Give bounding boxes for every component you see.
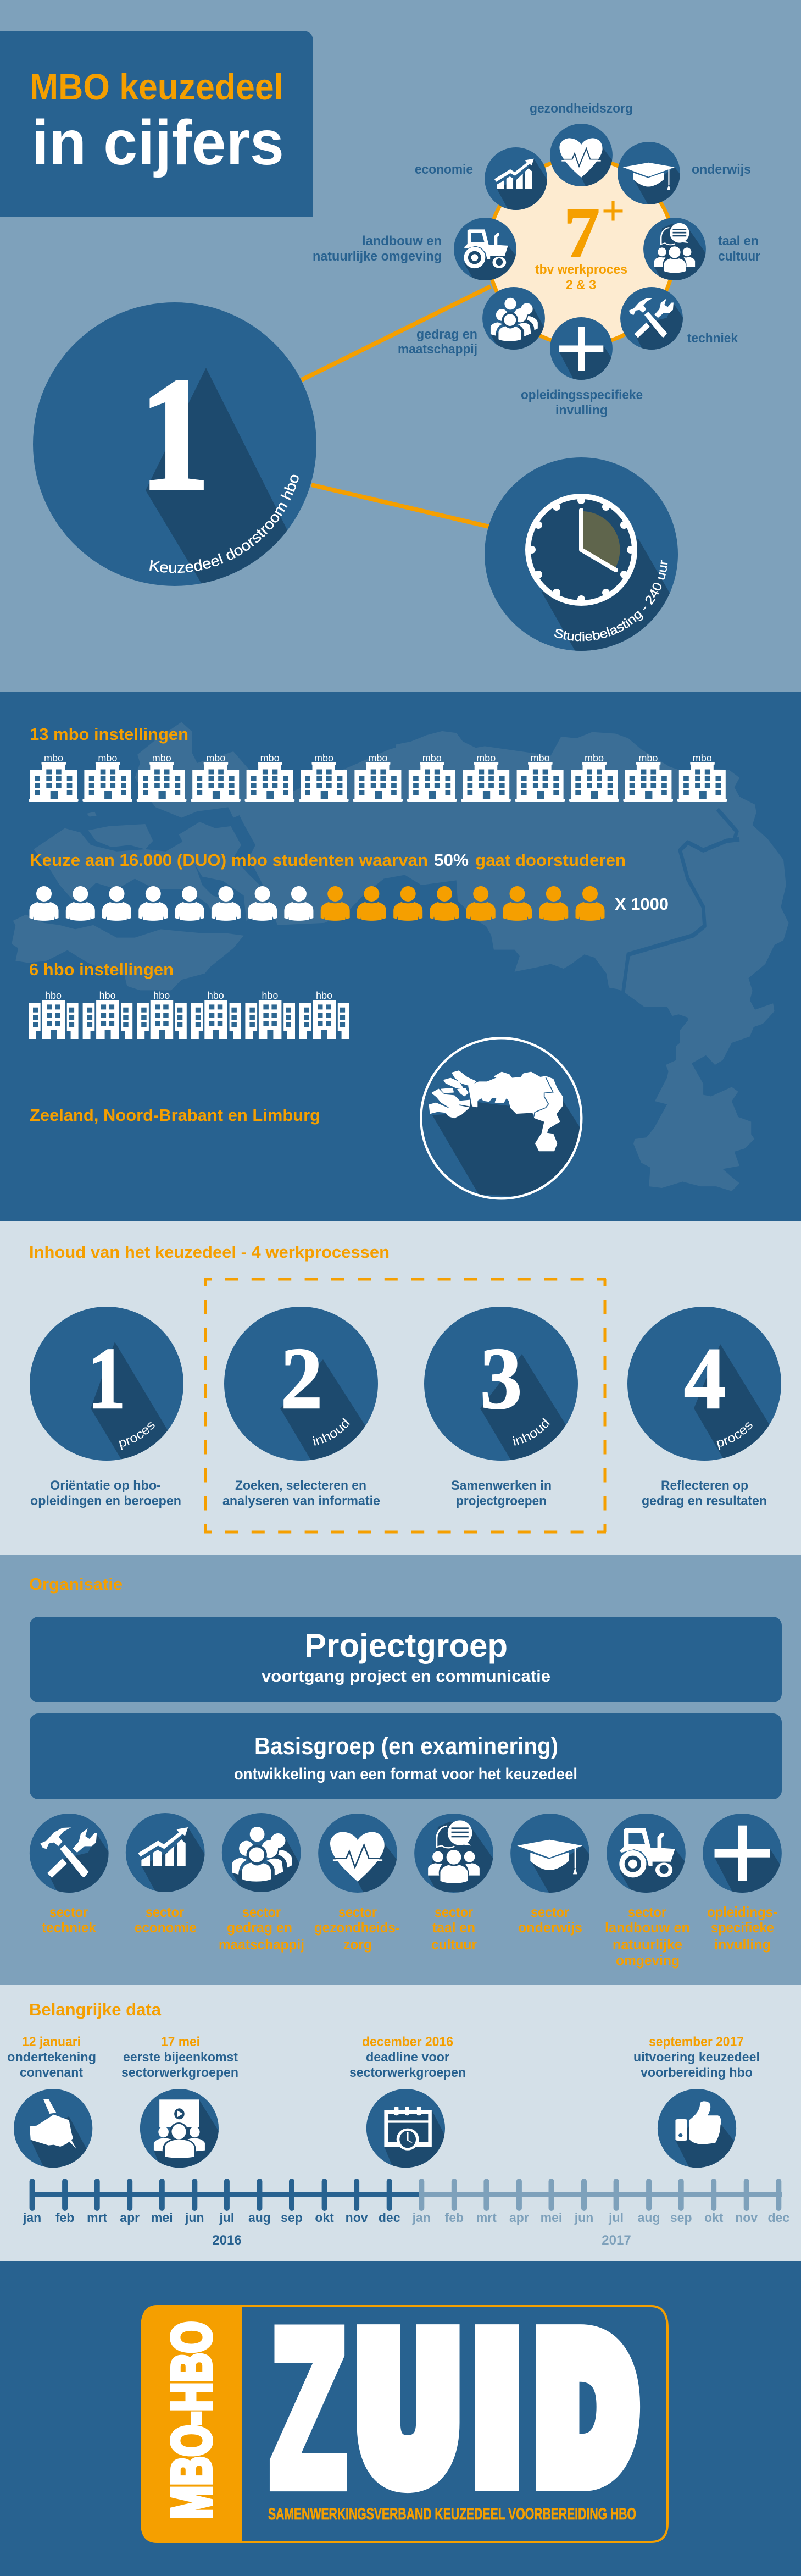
milestone text: 17 mei: eerste bijeenkomst — [123, 2050, 238, 2065]
sector labels around ring: landbouw en — [362, 234, 442, 248]
milestone text: 17 mei: 17 mei — [161, 2035, 200, 2049]
sector labels around ring — [313, 101, 760, 418]
sector captions: gezondheids- — [314, 1919, 400, 1936]
hbo buildings row: hbo — [262, 990, 278, 1001]
icon: gedrag en maatschappij — [482, 287, 546, 352]
timeline 2016: apr — [120, 2210, 140, 2225]
logo: ZUID wordmark — [270, 2282, 633, 2532]
icon: sector taal en cultuur — [414, 1814, 497, 1895]
sector captions: techniek — [42, 1919, 96, 1936]
heading: keuze aan 16.000 studenten: gaat doorstuderen — [475, 850, 626, 870]
milestone text: december 2016: deadline voor — [366, 2050, 449, 2065]
timeline 2017: 2017 — [602, 2233, 631, 2248]
process 1 circle: 1 — [88, 1330, 125, 1427]
background: section regio — [0, 692, 801, 1221]
milestone text: september 2017: september 2017 — [649, 2035, 744, 2049]
heading: provinces: Zeeland, Noord-Brabant en Limburg — [30, 1105, 320, 1125]
timeline 2016: dec — [379, 2210, 400, 2225]
timeline 2017: apr — [509, 2210, 529, 2225]
mbo buildings row: mbo — [531, 753, 550, 764]
mbo buildings row: mbo — [368, 753, 387, 764]
milestone text: december 2016: december 2016 — [362, 2035, 453, 2049]
sector labels around ring: opleidingsspecifieke — [521, 388, 643, 402]
process 3 circle: 3 — [480, 1329, 522, 1427]
icon: sector gezondheidszorg — [318, 1814, 398, 1894]
process 4 circle — [627, 1307, 781, 1461]
mbo buildings row: mbo — [314, 753, 333, 764]
timeline 2017: aug — [638, 2210, 660, 2225]
sector captions: onderwijs — [518, 1919, 582, 1936]
multiplier label: X 1000 — [615, 894, 669, 914]
timeline 2016: mei — [151, 2210, 173, 2225]
timeline 2016: jun — [185, 2210, 204, 2225]
icon: economie — [485, 147, 550, 211]
hbo buildings row: hbo — [99, 990, 116, 1001]
timeline 2016: nov — [346, 2210, 368, 2225]
sector captions: invulling — [714, 1936, 771, 1953]
process captions: opleidingen en beroepen — [30, 1494, 181, 1508]
heading: 6 hbo instellingen: 6 hbo instellingen — [29, 960, 174, 979]
icon: thumbs up — [658, 2089, 741, 2169]
process captions: projectgroepen — [456, 1494, 547, 1508]
sector captions: sector — [242, 1904, 281, 1920]
pictogram: 16 persons, 8 white and 8 orange — [30, 886, 604, 921]
sector captions: gedrag en — [227, 1919, 292, 1936]
milestone text: september 2017: uitvoering keuzedeel — [633, 2050, 760, 2065]
timeline 2016: aug — [248, 2210, 271, 2225]
milestone text: december 2016 — [349, 2035, 466, 2080]
panel: title block — [0, 31, 313, 217]
sector captions: sector — [435, 1904, 473, 1920]
process 2 circle: inhoud — [313, 1418, 350, 1446]
title line 2: in cijfers — [32, 108, 284, 178]
sector labels around ring: gedrag en — [416, 327, 477, 342]
timeline 2016: feb — [55, 2210, 74, 2225]
sector captions: sector — [146, 1904, 184, 1920]
mbo buildings row: mbo — [260, 753, 280, 764]
background: section overview — [0, 0, 801, 692]
sector captions: sector — [628, 1904, 666, 1920]
sector captions: zorg — [343, 1936, 372, 1953]
timeline 2016: mrt — [87, 2210, 108, 2225]
mbo buildings row: mbo — [98, 753, 117, 764]
sector labels around ring: cultuur — [718, 249, 760, 264]
background: section organisatie — [0, 1555, 801, 1985]
sector captions: landbouw en — [605, 1919, 690, 1936]
icon: opleidingsspecifiek — [550, 317, 616, 381]
process 1 circle — [30, 1307, 183, 1461]
mbo buildings row: mbo — [44, 753, 63, 764]
ring: 7+ sectoren: 2 & 3 — [566, 278, 596, 292]
heading: keuze aan 16.000 studenten — [30, 850, 626, 870]
timeline 2017 — [412, 2181, 789, 2248]
timeline 2017: okt — [704, 2210, 724, 2225]
sector captions: cultuur — [431, 1936, 477, 1953]
timeline 2017: mei — [541, 2210, 562, 2225]
sector labels around ring: natuurlijke omgeving — [313, 249, 442, 264]
mbo buildings row: mbo — [206, 753, 225, 764]
icon: calendar deadline — [366, 2089, 449, 2169]
icon: presentation meeting — [140, 2089, 225, 2169]
process 2 circle — [224, 1307, 378, 1461]
timeline 2016: okt — [315, 2210, 334, 2225]
hbo buildings row: hbo — [316, 990, 332, 1001]
sector captions: sector — [531, 1904, 569, 1920]
logo: MBO-HBO ZUID — [141, 2282, 668, 2543]
sector labels around ring: invulling — [555, 403, 608, 418]
dashed box around werkproces 2 and 3 — [204, 1279, 606, 1532]
milestone text: september 2017: voorbereiding hbo — [641, 2065, 753, 2080]
icon: onderwijs — [618, 142, 682, 206]
icon: sector gedrag en maatschappij — [222, 1813, 302, 1895]
milestone text: 17 mei — [121, 2035, 238, 2080]
logo: ZUID wordmark: Z — [270, 2282, 347, 2532]
mbo buildings row: mbo — [422, 753, 442, 764]
sector captions: omgeving — [616, 1952, 680, 1969]
ring: 7+ sectoren: 7 — [564, 193, 600, 273]
process captions: Samenwerken in — [451, 1478, 552, 1493]
sector captions: sector — [49, 1904, 88, 1920]
sector labels around ring: economie — [415, 162, 473, 177]
icon: sector landbouw — [607, 1814, 688, 1894]
process 4 circle: proces — [716, 1422, 753, 1450]
sector labels around ring: taal en — [718, 234, 759, 248]
process captions: Zoeken, selecteren en — [235, 1478, 366, 1493]
mbo buildings row: mbo — [476, 753, 496, 764]
timeline 2017: jan — [412, 2210, 431, 2225]
timeline 2016: jul — [219, 2210, 234, 2225]
icon: signing hand — [14, 2089, 97, 2169]
timeline 2016: 2016 — [212, 2233, 242, 2248]
sector captions: natuurlijke — [613, 1936, 682, 1953]
milestone text: december 2016: sectorwerkgroepen — [349, 2065, 466, 2080]
timeline 2017: jul — [608, 2210, 624, 2225]
sector captions: maatschappij — [219, 1936, 304, 1953]
heading: keuze aan 16.000 studenten: Keuze aan 16.000 (DUO) mbo studenten waarvan — [30, 850, 428, 870]
timeline 2017: nov — [735, 2210, 758, 2225]
icon: map of the region in a circle — [421, 1038, 589, 1198]
panel: basisgroep: Basisgroep (en examinering) — [254, 1733, 558, 1760]
clock circle: studiebelasting — [485, 457, 678, 651]
panel: basisgroep — [30, 1713, 782, 1799]
timeline 2016 — [23, 2181, 419, 2248]
mbo buildings row: mbo — [585, 753, 604, 764]
sector captions: taal en — [432, 1919, 475, 1936]
ring: 7+ sectoren — [488, 158, 675, 345]
timeline 2017: jun — [574, 2210, 593, 2225]
icon: opleidingsspecifiek — [703, 1814, 786, 1894]
icon: sector onderwijs — [510, 1814, 592, 1894]
heading: inhoud van het keuzedeel: Inhoud van het keuzedeel - 4 werkprocessen — [29, 1242, 390, 1262]
milestone text: 12 januari: 12 januari — [22, 2035, 81, 2049]
milestone text: 17 mei: sectorwerkgroepen — [121, 2065, 238, 2080]
big circle: keuzedeel doorstroom hbo: 1 — [140, 344, 209, 524]
sector captions: specifieke — [711, 1919, 774, 1936]
milestone text: 12 januari — [7, 2035, 96, 2080]
process 3 circle: inhoud — [513, 1418, 550, 1446]
panel: basisgroep: ontwikkeling van een format voor het keuzedeel — [234, 1765, 577, 1783]
background: section data — [0, 1985, 801, 2261]
icon: techniek — [620, 287, 686, 351]
process 3 circle — [424, 1307, 578, 1461]
background map of the region — [12, 722, 788, 1191]
sector captions: sector — [338, 1904, 377, 1920]
sector labels around ring: maatschappij — [398, 342, 477, 357]
connector lines — [302, 286, 491, 527]
sector captions: opleidings- — [707, 1904, 777, 1920]
background: section logo — [0, 2261, 801, 2576]
ring: 7+ sectoren: tbv werkproces — [535, 262, 627, 277]
timeline 2017: feb — [445, 2210, 464, 2225]
background: section inhoud — [0, 1221, 801, 1555]
milestone text: september 2017 — [633, 2035, 760, 2080]
icon: sector techniek — [30, 1814, 113, 1895]
timeline — [23, 2181, 789, 2248]
process captions — [30, 1478, 767, 1508]
process 2 circle: 2 — [281, 1329, 322, 1427]
timeline 2017: mrt — [476, 2210, 497, 2225]
mbo buildings row — [29, 753, 727, 802]
mbo buildings row: mbo — [693, 753, 712, 764]
logo: ZUID wordmark: UID — [361, 2302, 633, 2513]
process 1 circle: proces — [119, 1422, 155, 1450]
logo: vertical text: MBO-HBO — [161, 2321, 222, 2519]
sector labels around ring: gezondheidszorg — [530, 101, 633, 116]
milestone text: 12 januari: ondertekening — [7, 2050, 96, 2065]
big circle: keuzedeel doorstroom hbo: Keuzedeel doorstroom hbo — [149, 475, 299, 573]
process captions: gedrag en resultaten — [642, 1494, 767, 1508]
hbo buildings row: hbo — [153, 990, 170, 1001]
panel: projectgroep: Projectgroep — [304, 1627, 508, 1664]
panel: projectgroep — [30, 1617, 782, 1702]
heading: belangrijke data: Belangrijke data — [29, 2000, 162, 2019]
sector captions: economie — [135, 1919, 197, 1936]
logo: tagline: SAMENWERKINGSVERBAND KEUZEDEEL VOORBEREIDING HBO — [268, 2505, 636, 2523]
timeline 2016: jan — [23, 2210, 41, 2225]
mbo buildings row: mbo — [152, 753, 171, 764]
clock circle: studiebelasting: Studiebelasting - 240 uur — [554, 560, 668, 641]
milestone text: 12 januari: convenant — [20, 2065, 83, 2080]
big circle: keuzedeel doorstroom hbo — [33, 302, 316, 586]
panel: projectgroep: voortgang project en communicatie — [262, 1667, 550, 1685]
icon: taal en cultuur — [643, 218, 709, 282]
ring: 7+ sectoren: + — [602, 189, 625, 233]
hbo buildings row: hbo — [45, 990, 62, 1001]
hbo buildings row — [29, 990, 349, 1039]
heading: 13 mbo instellingen: 13 mbo instellingen — [30, 725, 188, 744]
sector captions — [42, 1904, 777, 1969]
icon: landbouw — [454, 218, 518, 281]
timeline 2017: dec — [767, 2210, 789, 2225]
sector labels around ring: onderwijs — [692, 162, 751, 177]
hbo buildings row: hbo — [208, 990, 224, 1001]
process 4 circle: 4 — [684, 1329, 726, 1427]
timeline 2016: sep — [281, 2210, 303, 2225]
icon: sector economie — [126, 1813, 208, 1893]
heading: organisatie: Organisatie — [29, 1574, 123, 1594]
heading: keuze aan 16.000 studenten: 50% — [434, 850, 469, 870]
sector labels around ring: techniek — [687, 331, 738, 346]
process captions: Reflecteren op — [661, 1478, 748, 1493]
icon: gezondheidszorg — [550, 124, 614, 187]
timeline 2017: sep — [670, 2210, 692, 2225]
process captions: analyseren van informatie — [222, 1494, 380, 1508]
mbo buildings row: mbo — [638, 753, 658, 764]
process captions: Oriëntatie op hbo- — [50, 1478, 161, 1493]
title line 1: MBO keuzedeel — [30, 67, 283, 108]
